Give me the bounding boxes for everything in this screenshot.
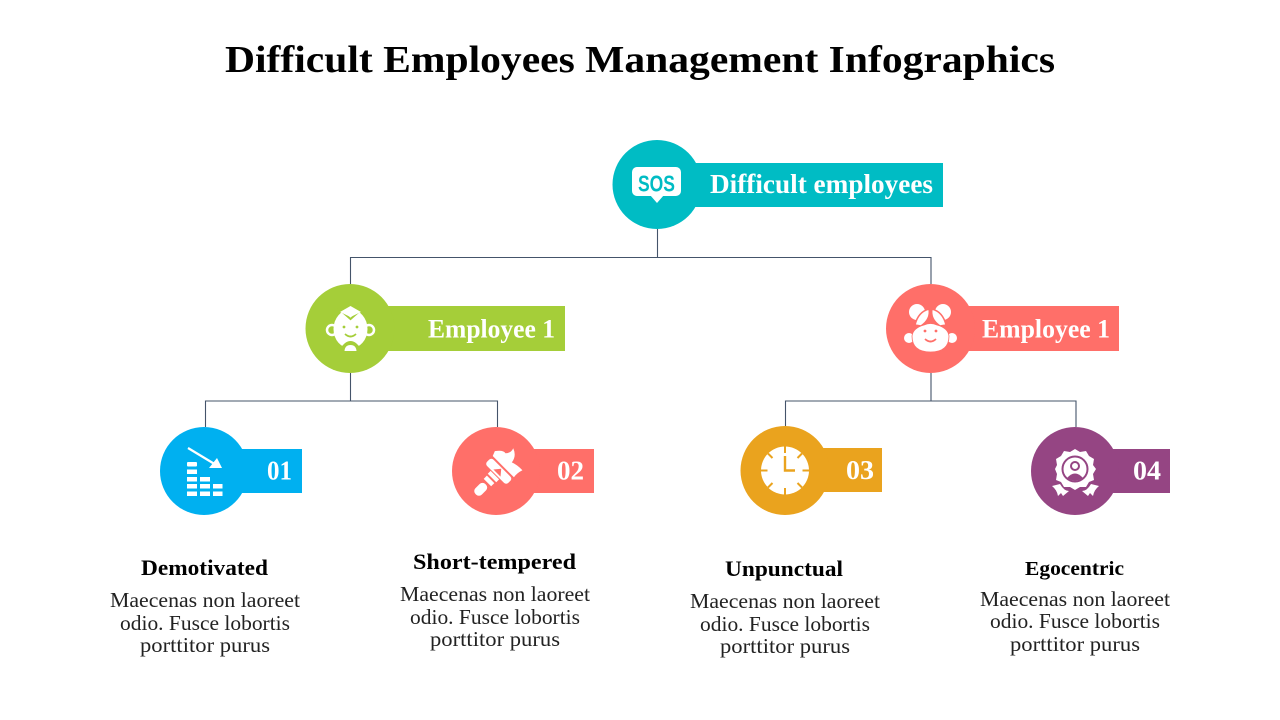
icon: SOS speech bubble xyxy=(632,167,681,203)
text block: Unpunctual: porttitor purus xyxy=(720,634,850,658)
text block: Unpunctual: odio. Fusce lobortis xyxy=(700,612,870,636)
text block: Egocentric: Egocentric xyxy=(1025,558,1124,580)
text block: Unpunctual xyxy=(690,556,880,658)
node 04 xyxy=(1031,427,1170,515)
text block: Demotivated: Maecenas non laoreet xyxy=(110,588,300,612)
text block: Egocentric: porttitor purus xyxy=(1010,632,1140,656)
text block: Demotivated: odio. Fusce lobortis xyxy=(120,611,290,635)
text block: Unpunctual: Unpunctual xyxy=(725,556,843,581)
node 01 xyxy=(160,427,302,515)
text block: Short-tempered: Short-tempered xyxy=(413,549,576,574)
icon: declining bar chart xyxy=(187,448,222,496)
node 03 xyxy=(740,426,882,515)
node 03: 03 xyxy=(846,455,874,485)
text block: Demotivated xyxy=(110,555,300,657)
icon: torch xyxy=(464,441,529,506)
node 04: 04 xyxy=(1133,456,1161,486)
text block: Short-tempered: Maecenas non laoreet xyxy=(400,582,590,606)
text block: Demotivated: Demotivated xyxy=(141,555,268,580)
node: employee 1 green: Employee 1 xyxy=(428,314,555,344)
text block: Egocentric: Maecenas non laoreet xyxy=(980,587,1170,611)
root node: difficult employees: Difficult employees xyxy=(710,169,933,199)
node 01: 01 xyxy=(267,456,292,486)
node: employee 2 coral xyxy=(886,284,1119,373)
text block: Demotivated: porttitor purus xyxy=(140,633,270,657)
text block: Short-tempered: porttitor purus xyxy=(430,627,560,651)
icon: award badge xyxy=(1052,449,1099,496)
text block: Short-tempered xyxy=(400,549,590,651)
node 02 xyxy=(452,427,594,515)
root node: difficult employees xyxy=(612,140,943,229)
node: employee 2 coral: Employee 1 xyxy=(982,314,1110,344)
node 02: 02 xyxy=(557,456,584,486)
text block: Egocentric xyxy=(980,558,1170,656)
text block: Egocentric: odio. Fusce lobortis xyxy=(990,609,1160,633)
icon: SOS speech bubble: SOS xyxy=(638,170,675,196)
connector lines: root to employees xyxy=(350,229,931,284)
text block: Unpunctual: Maecenas non laoreet xyxy=(690,589,880,613)
node: employee 1 green xyxy=(306,284,565,373)
title: Difficult Employees Management Infographics xyxy=(225,39,1055,81)
icon: girl face xyxy=(904,304,957,352)
icon: clock xyxy=(761,446,809,494)
connector lines: employee 1 to items xyxy=(206,373,498,427)
icon: man face xyxy=(327,306,374,352)
connector lines: employee 2 to items xyxy=(786,373,1076,427)
text block: Short-tempered: odio. Fusce lobortis xyxy=(410,605,580,629)
